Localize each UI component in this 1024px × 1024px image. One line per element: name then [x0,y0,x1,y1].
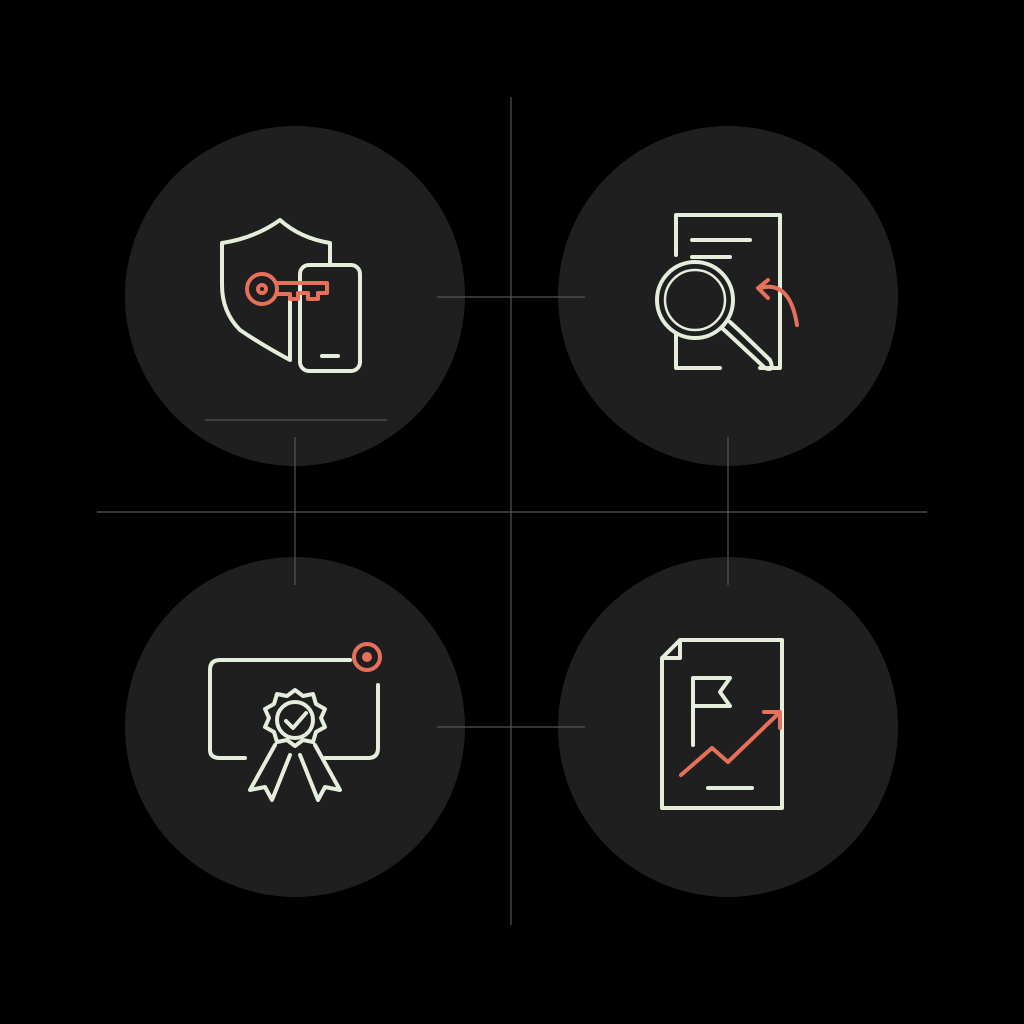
icon: shield key phone [222,220,360,371]
circles [125,126,898,897]
icon: document flag trend [662,640,782,808]
icon: document magnifier [657,215,797,369]
icon: certificate [210,644,380,800]
